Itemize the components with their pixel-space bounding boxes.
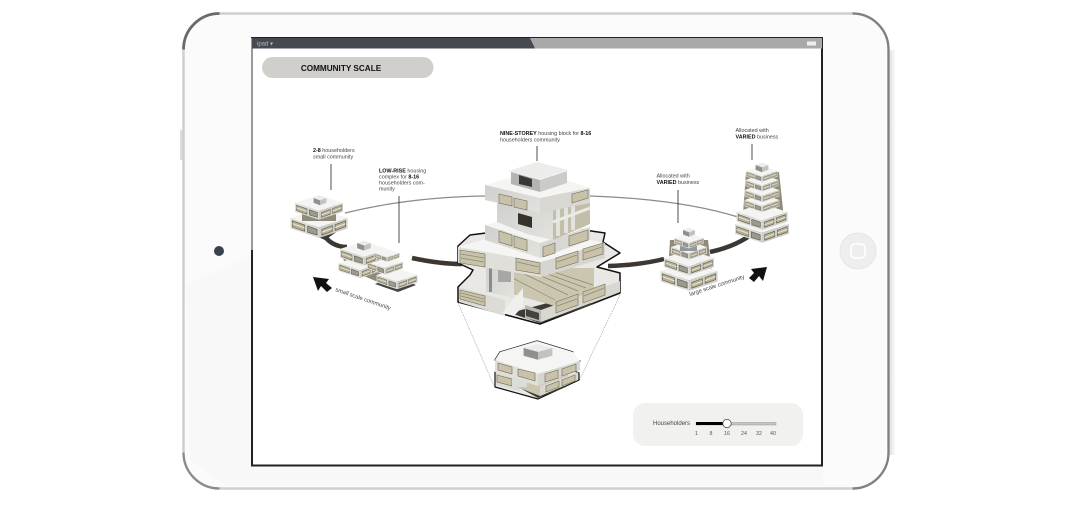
mid slab <box>485 210 590 258</box>
householders slider panel: Householders <box>653 421 690 427</box>
householders slider panel: 8 <box>710 431 713 437</box>
label: low-rise: LOW-RISE housing <box>379 168 426 174</box>
building outline <box>458 225 620 324</box>
caption: large scale community: large scale community <box>689 274 746 298</box>
icon: home button <box>840 233 876 269</box>
roof pavilion <box>508 162 568 192</box>
mid-scale building right <box>660 228 718 291</box>
tower core <box>497 188 590 240</box>
upper slab <box>485 170 590 213</box>
dotted zoom lines <box>458 295 620 386</box>
nine-storey central building <box>458 162 620 386</box>
label: low-rise <box>379 168 426 243</box>
label: nine-storey: NINE-STOREY housing block for 8-16 <box>500 131 591 137</box>
label: low-rise: householders com- <box>379 180 425 186</box>
small community building <box>290 195 348 240</box>
caption: small scale community: small scale community <box>334 287 392 312</box>
label: varied business mid: VARIED business <box>656 180 700 186</box>
lower storey <box>459 256 620 322</box>
arrow: small scale <box>313 277 332 292</box>
label: varied business top: VARIED business <box>736 134 779 140</box>
label: nine-storey <box>500 131 591 161</box>
ground shadow <box>510 297 594 323</box>
large-scale tower right <box>735 163 789 243</box>
arrow: large scale <box>749 267 767 282</box>
second floor slab <box>458 226 605 277</box>
thin scale ring <box>345 196 738 217</box>
leader line <box>398 196 400 243</box>
low-rise housing complex <box>338 240 417 292</box>
householders slider panel <box>633 403 803 446</box>
tablet device <box>180 14 896 488</box>
label: low-rise: complex for 8-16 <box>379 174 419 180</box>
label: 2-8 householders: small community <box>313 154 353 160</box>
title pill <box>262 57 434 78</box>
householders slider panel: 1 <box>695 431 698 437</box>
label: varied business top: Allocated with <box>736 128 769 134</box>
label: varied business mid <box>656 174 700 223</box>
label: 2-8 householders: 2-8 householders <box>313 148 355 154</box>
label: 2-8 householders <box>313 148 355 190</box>
screen <box>252 38 822 466</box>
leader line <box>751 144 753 160</box>
leader line <box>330 164 332 190</box>
householders slider panel: 16 <box>724 431 730 437</box>
label: varied business mid: Allocated with <box>656 174 690 180</box>
title pill: COMMUNITY SCALE <box>301 64 382 73</box>
householders slider panel: 24 <box>741 431 747 437</box>
label: low-rise: munity <box>379 186 395 192</box>
lower building module <box>495 341 580 399</box>
leader line <box>536 146 538 161</box>
status bar <box>252 38 822 48</box>
icon: camera <box>214 246 224 256</box>
label: nine-storey: householders community <box>500 138 560 144</box>
householders slider panel: 40 <box>770 431 776 437</box>
householders slider panel: 32 <box>756 431 762 437</box>
thick scale ring <box>321 231 756 266</box>
label: varied business top <box>736 128 779 160</box>
status bar: ipad ▾ <box>257 42 273 48</box>
leader line <box>677 190 679 223</box>
